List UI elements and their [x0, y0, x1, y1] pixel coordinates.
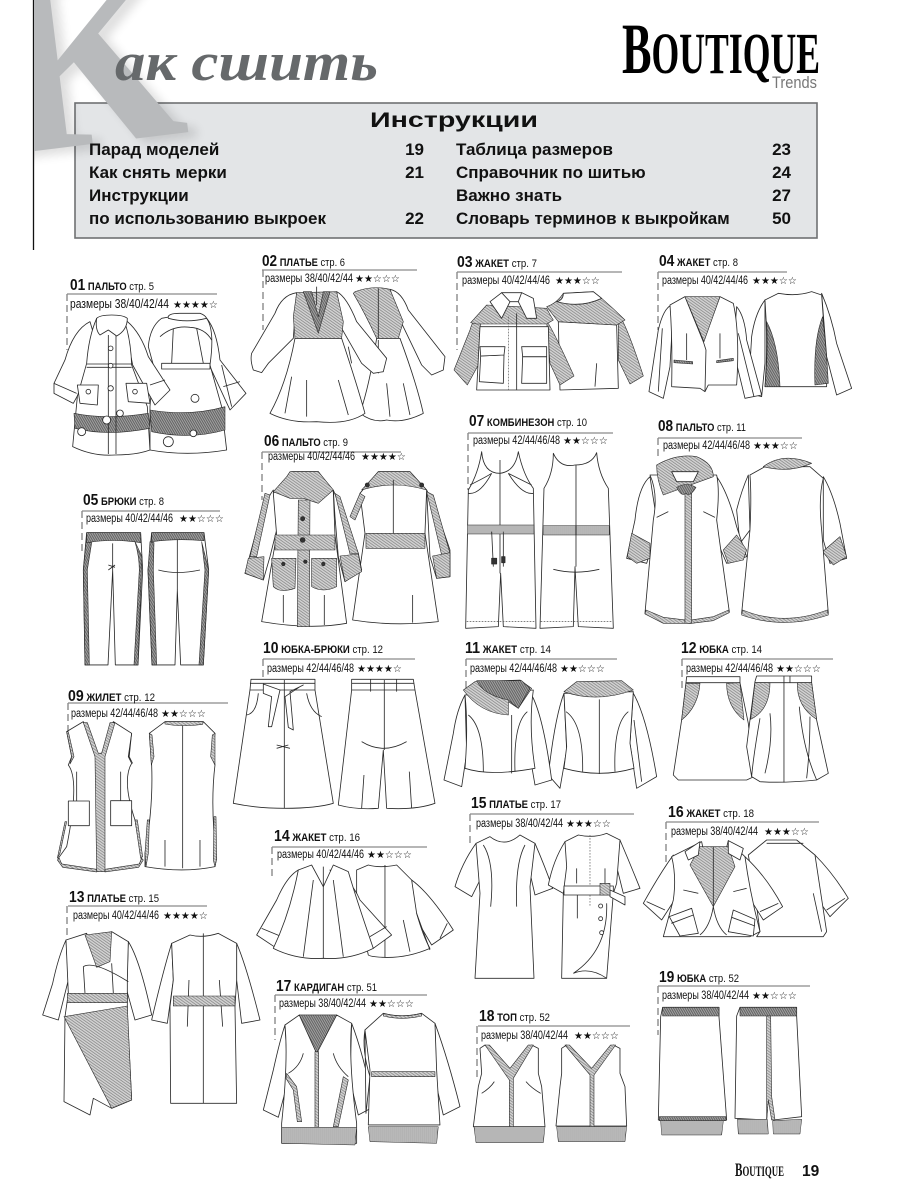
- model 03 jacket: 03 ЖАКЕТ стр. 7: [457, 254, 537, 271]
- model 17 cardigan: ★★☆☆☆: [369, 999, 414, 1010]
- model 09 vest: 09 ЖИЛЕТ стр. 12: [68, 688, 155, 705]
- model 17 cardigan: 17 КАРДИГАН стр. 51: [276, 978, 377, 995]
- sketch: dress 13: [43, 932, 260, 1115]
- model 07 jumpsuit: ★★☆☆☆: [563, 436, 608, 447]
- model 03 jacket: ★★★☆☆: [555, 276, 600, 287]
- model 02 dress: ★★☆☆☆: [355, 274, 400, 285]
- model 04 jacket: ★★★☆☆: [752, 276, 797, 287]
- model 06 coat: размеры 40/42/44/46: [268, 451, 355, 463]
- model 06 coat: [245, 433, 450, 627]
- contents list: left column: по использованию выкроек: [89, 209, 327, 228]
- model 10 culottes: [233, 640, 435, 809]
- model 18 top: размеры 38/40/42/44: [481, 1030, 568, 1042]
- model 03 jacket: размеры 40/42/44/46: [462, 275, 550, 287]
- model 19 skirt: ★★☆☆☆: [752, 991, 797, 1002]
- page number: 19: [802, 1163, 820, 1180]
- model 08 coat: размеры 42/44/46/48: [663, 440, 750, 452]
- contents list: left column: Парад моделей: [89, 140, 219, 159]
- model 08 coat: ★★★☆☆: [753, 441, 798, 452]
- contents panel background: [75, 103, 817, 238]
- contents heading: Инструкции: [370, 109, 538, 132]
- model 11 jacket: [444, 640, 657, 788]
- model 07 jumpsuit: [466, 413, 613, 628]
- contents list: left column: [89, 140, 424, 228]
- model 07 jumpsuit: размеры 42/44/46/48: [473, 435, 560, 447]
- contents list: right column: 24: [772, 163, 792, 182]
- model 10 culottes: ★★★★☆: [357, 664, 402, 675]
- sketch: jumpsuit 07: [466, 452, 613, 628]
- sketch: coat 01: [54, 313, 246, 455]
- sketch: dress 15: [455, 833, 640, 978]
- model 12 skirt: размеры 42/44/46/48: [686, 663, 773, 675]
- contents list: right column: Словарь терминов к выкройкам: [456, 209, 730, 228]
- model 09 vest: ★★☆☆☆: [161, 709, 206, 720]
- model 04 jacket: размеры 40/42/44/46: [662, 275, 748, 287]
- model 02 dress: размеры 38/40/42/44: [265, 273, 353, 285]
- model 08 coat: [627, 418, 847, 623]
- sketch: cardigan 17: [263, 1013, 460, 1145]
- sketch: jacket 11: [444, 680, 657, 788]
- model 02 dress: 02 ПЛАТЬЕ стр. 6: [262, 253, 345, 270]
- model 09 vest: [57, 688, 228, 872]
- model 08 coat: 08 ПАЛЬТО стр. 11: [658, 418, 746, 435]
- logo: Boutique Trends: Trends: [772, 73, 817, 92]
- model 13 dress: ★★★★☆: [163, 911, 208, 922]
- contents list: right column: Справочник по шитью: [456, 163, 646, 182]
- model 01 coat: ★★★★☆: [173, 300, 218, 311]
- model 13 dress: размеры 40/42/44/46: [73, 910, 159, 922]
- contents list: right column: 50: [772, 209, 791, 228]
- model 03 jacket: [454, 254, 643, 390]
- model 14 jacket: размеры 40/42/44/46: [277, 849, 364, 861]
- sketch: vest 09: [57, 722, 217, 872]
- model 05 trousers: [82, 492, 224, 665]
- sketch: jacket 16: [643, 840, 848, 937]
- model 14 jacket: ★★☆☆☆: [367, 850, 412, 861]
- model 12 skirt: 12 ЮБКА стр. 14: [681, 640, 762, 657]
- model 11 jacket: ★★☆☆☆: [560, 664, 605, 675]
- contents list: left column: 19: [405, 140, 424, 159]
- model 06 coat: ★★★★☆: [361, 452, 406, 463]
- logo: Boutique Trends: [622, 9, 820, 92]
- model 06 coat: 06 ПАЛЬТО стр. 9: [264, 433, 348, 450]
- model 13 dress: 13 ПЛАТЬЕ стр. 15: [69, 889, 159, 906]
- model 15 dress: ★★★☆☆: [566, 819, 611, 830]
- model 02 dress: [251, 253, 445, 422]
- footer logo: BOUTIQUE: [735, 1160, 784, 1181]
- model 16 jacket: ★★★☆☆: [764, 827, 809, 838]
- model 07 jumpsuit: 07 КОМБИНЕЗОН стр. 10: [469, 413, 587, 430]
- model 12 skirt: ★★☆☆☆: [776, 664, 821, 675]
- sketch: skirt 12: [673, 676, 828, 783]
- contents list: left column: Инструкции: [89, 186, 189, 205]
- model 17 cardigan: размеры 38/40/42/44: [279, 998, 366, 1010]
- model 05 trousers: 05 БРЮКИ стр. 8: [83, 492, 164, 509]
- model 16 jacket: [643, 804, 848, 937]
- model 16 jacket: 16 ЖАКЕТ стр. 18: [668, 804, 754, 821]
- sketch: trousers 05: [83, 533, 209, 665]
- sketch: skirt 19: [658, 1007, 802, 1135]
- contents list: right column: Таблица размеров: [456, 140, 613, 159]
- model 11 jacket: 11 ЖАКЕТ стр. 14: [465, 640, 551, 657]
- contents list: left column: Как снять мерки: [89, 163, 227, 182]
- model 09 vest: размеры 42/44/46/48: [71, 708, 158, 720]
- sketch: coat 06: [245, 472, 450, 627]
- big drop-cap letter К: [34, 0, 198, 160]
- contents list: right column: 23: [772, 140, 791, 159]
- sketch: culottes 10: [233, 679, 435, 809]
- model 17 cardigan: [263, 978, 460, 1145]
- model 18 top: [473, 1008, 630, 1143]
- model 05 trousers: ★★☆☆☆: [179, 514, 224, 525]
- sketch: jacket 14: [257, 865, 453, 959]
- model 18 top: ★★☆☆☆: [574, 1031, 619, 1042]
- contents list: left column: 21: [405, 163, 424, 182]
- sketch: top 18: [473, 1045, 627, 1143]
- model 01 coat: размеры 38/40/42/44: [70, 296, 169, 311]
- model 16 jacket: размеры 38/40/42/44: [671, 826, 758, 838]
- model 19 skirt: размеры 38/40/42/44: [662, 990, 749, 1002]
- sketch: jacket 03: [454, 292, 643, 390]
- model 11 jacket: размеры 42/44/46/48: [470, 663, 557, 675]
- sketch: coat 08: [627, 456, 847, 623]
- model 18 top: 18 ТОП стр. 52: [479, 1008, 550, 1025]
- model 12 skirt: [673, 640, 833, 783]
- model 04 jacket: 04 ЖАКЕТ стр. 8: [659, 253, 738, 270]
- model 01 coat: 01 ПАЛЬТО стр. 5: [70, 277, 154, 294]
- model 14 jacket: 14 ЖАКЕТ стр. 16: [274, 828, 360, 845]
- model 15 dress: 15 ПЛАТЬЕ стр. 17: [471, 795, 561, 812]
- model 10 culottes: 10 ЮБКА-БРЮКИ стр. 12: [263, 640, 383, 657]
- model 05 trousers: размеры 40/42/44/46: [86, 513, 173, 525]
- model 04 jacket: [649, 253, 852, 398]
- sketch: dress 02: [251, 287, 445, 422]
- page margin line: [32, 0, 34, 250]
- model 15 dress: размеры 38/40/42/44: [476, 818, 563, 830]
- sketch: jacket 04: [649, 292, 852, 398]
- model 10 culottes: размеры 42/44/46/48: [267, 663, 354, 675]
- contents list: right column: [456, 140, 792, 228]
- title: ак сшить: [115, 32, 378, 92]
- contents list: right column: Важно знать: [456, 186, 562, 205]
- model 19 skirt: [658, 969, 810, 1135]
- model 14 jacket: [257, 828, 453, 959]
- contents list: right column: 27: [772, 186, 791, 205]
- contents list: left column: 22: [405, 209, 424, 228]
- model 13 dress: [43, 889, 260, 1115]
- model 01 coat: [54, 277, 246, 455]
- model 15 dress: [455, 795, 640, 978]
- model 19 skirt: 19 ЮБКА стр. 52: [659, 969, 739, 986]
